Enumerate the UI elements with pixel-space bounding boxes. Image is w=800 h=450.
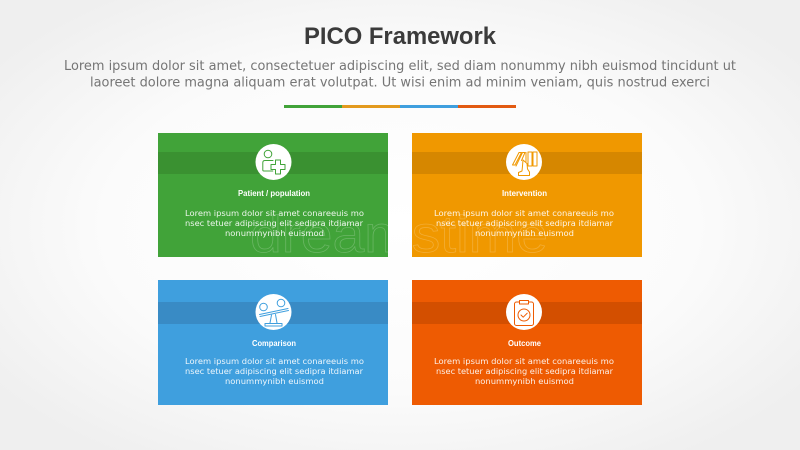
intro text: laoreet dolore magna aliquam erat volutpat. Ut wisi enim ad minim veniam, quis nostrud exerci: [90, 76, 710, 90]
title: PICO Framework: [304, 23, 497, 50]
panel: comparison: [158, 280, 388, 405]
panel: outcome: nonummynibh euismod: [475, 377, 574, 386]
watermark: dreamstime: [250, 206, 548, 264]
panel: outcome: Lorem ipsum dolor sit amet conareeuis mo: [434, 357, 614, 366]
panel: intervention: nonummynibh euismod: [475, 229, 574, 238]
panel: intervention: Lorem ipsum dolor sit amet conareeuis mo: [434, 209, 614, 218]
panel: comparison: nonummynibh euismod: [225, 377, 324, 386]
panel: intervention: Intervention: [502, 189, 547, 198]
panel: intervention: [412, 133, 642, 257]
icon: hand with books: [512, 152, 537, 176]
panel: outcome: nsec tetuer adipiscing elit sedipra itdiamar: [436, 367, 614, 376]
panel: patient / population: nsec tetuer adipiscing elit sedipra itdiamar: [185, 219, 364, 228]
panel: patient / population: Lorem ipsum dolor sit amet conareeuis mo: [185, 209, 364, 218]
panel: outcome: Outcome: [508, 339, 542, 348]
panel: patient / population: Patient / population: [238, 189, 310, 198]
panel: patient / population: [158, 133, 388, 257]
icon: clipboard with check: [514, 300, 534, 326]
icon: balance scale: [260, 299, 288, 326]
panel: patient / population: nonummynibh euismod: [225, 229, 324, 238]
four-colour divider: [284, 105, 516, 108]
panel: intervention: nsec tetuer adipiscing elit sedipra itdiamar: [436, 219, 614, 228]
panel: comparison: Lorem ipsum dolor sit amet conareeuis mo: [185, 357, 364, 366]
panel: outcome: [412, 280, 642, 405]
intro text: Lorem ipsum dolor sit amet, consectetuer adipiscing elit, sed diam nonummy nibh euismod tincidunt ut: [64, 59, 736, 74]
panel: comparison: nsec tetuer adipiscing elit sedipra itdiamar: [185, 367, 364, 376]
icon: patient with medical cross: [263, 150, 285, 174]
panel: comparison: Comparison: [252, 339, 296, 348]
intro text: [64, 59, 736, 90]
